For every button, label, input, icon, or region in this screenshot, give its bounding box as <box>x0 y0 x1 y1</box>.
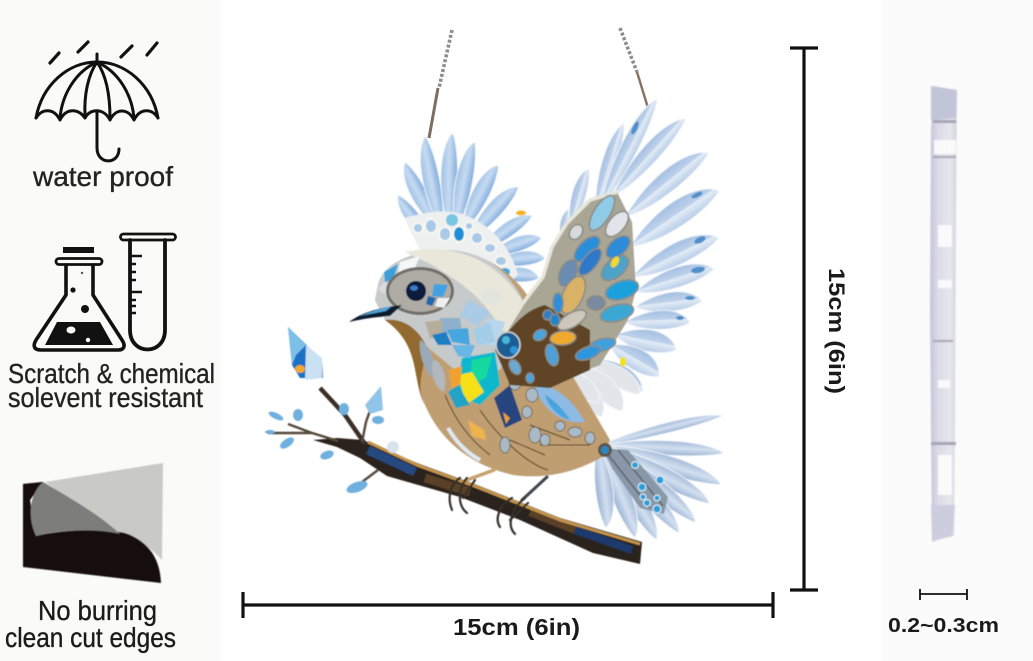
label: width: 15cm (6in) <box>453 614 580 640</box>
back wing jewelled crest <box>404 211 518 300</box>
icon: umbrella with rain <box>36 42 158 161</box>
icon: peeled film sheet <box>23 463 163 583</box>
dimension: height bracket <box>790 48 849 590</box>
dimension: width bracket <box>243 592 773 640</box>
tail feathers <box>590 409 724 543</box>
text: water proof: water proof <box>32 161 173 192</box>
text: no burring clean cut edges: clean cut edges <box>5 622 176 653</box>
text: no burring clean cut edges: No burring <box>38 595 157 626</box>
feather tip colour dabs <box>630 121 707 320</box>
branch and twigs <box>268 388 642 564</box>
back wing feathers <box>391 133 545 283</box>
front wing feathers <box>557 94 723 398</box>
neck and breast mosaic panes <box>425 288 505 345</box>
head panes <box>378 256 454 315</box>
tail jewels <box>602 448 668 514</box>
panel: feature list <box>5 42 215 653</box>
bird body and head <box>349 249 612 476</box>
text: scratch and chemical solvent resistant <box>8 358 215 413</box>
front wing jewel panel <box>495 192 641 388</box>
iridescent chest panes <box>420 322 612 470</box>
crystal buds <box>265 327 399 495</box>
thickness strip side view <box>930 86 957 542</box>
label: height: 15cm (6in) <box>824 268 849 394</box>
dimension: thickness bracket <box>888 589 999 637</box>
illustration: crystal bird on a branch <box>265 94 724 564</box>
text: scratch and chemical solvent resistant: solevent resistant <box>8 382 203 413</box>
text: no burring clean cut edges <box>5 595 176 653</box>
label: thickness: 0.2~0.3cm <box>888 615 999 637</box>
lower covert feathers <box>552 351 646 425</box>
hanging chains <box>429 28 648 138</box>
icon: beak <box>349 305 402 322</box>
legs and claws <box>450 470 547 534</box>
text: scratch and chemical solvent resistant: Scratch & chemical <box>8 358 215 389</box>
icon: flask and test tube <box>34 234 176 350</box>
